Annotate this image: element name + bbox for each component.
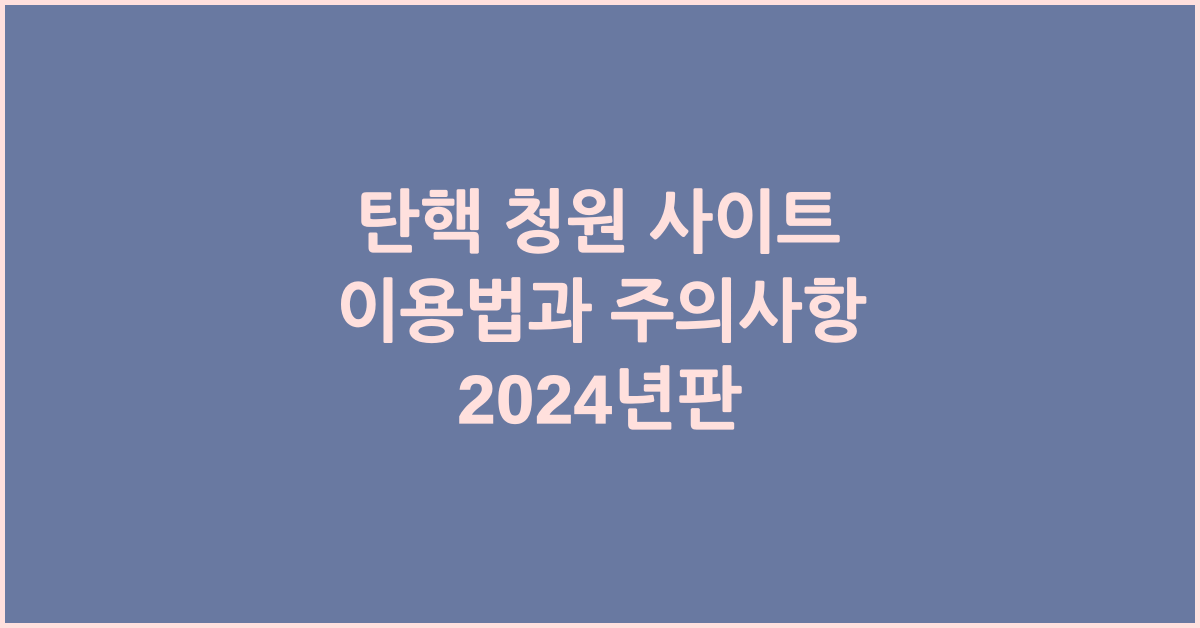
title: 탄핵 청원 사이트 — [355, 185, 841, 261]
title: 2024년판 — [457, 362, 743, 438]
title: 이용법과 주의사항 — [336, 274, 866, 350]
